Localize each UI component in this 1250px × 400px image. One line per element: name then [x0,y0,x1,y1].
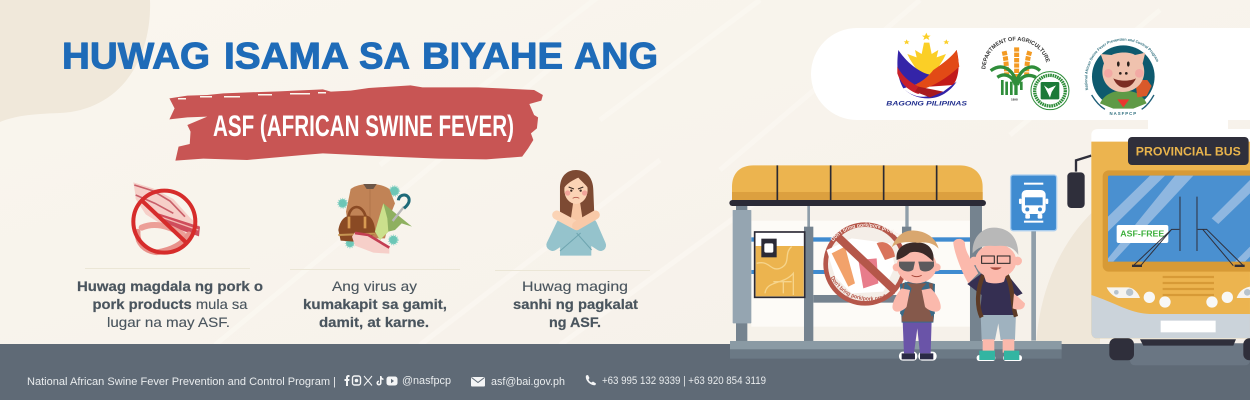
banner text: ASF (AFRICAN SWINE FEVER) [213,110,514,143]
logo pill [811,28,1250,129]
destination sign: PROVINCIAL BUS [1136,146,1241,159]
footer text [27,375,766,388]
column 1: no pork [77,182,263,330]
divider [290,268,460,270]
no pork sign [823,222,904,306]
white panel [811,28,1250,130]
map board [755,232,805,297]
divider [495,270,650,272]
bus stop sign [1011,175,1057,341]
column 2: virus clings: damit, at karne. [319,315,429,330]
older man traveller [953,228,1025,361]
column 3: woman crossing arms: ng ASF. [549,315,601,330]
icon: woman with crossed arms [552,170,601,256]
bus body [1091,129,1250,360]
bus shelter scene [729,165,1062,361]
logo: NASFPCP pig [1084,38,1158,116]
background hill behind bus [1036,205,1100,344]
no pork sign: Don't bring pork/pork products [830,276,895,301]
column 3: woman crossing arms: sanhi ng pagkalat [513,297,639,312]
column 2: virus clings [290,184,460,330]
footer email: asf@bai.gov.ph [491,376,565,388]
windshield [1103,170,1250,272]
brush stroke shape [169,85,543,161]
column 1: no pork: pork products mula sa [92,297,248,312]
title: ANG [574,36,658,76]
boy traveller [892,230,941,361]
brush banner: ASF [169,85,543,161]
column 1: no pork: lugar na may ASF. [107,315,230,330]
icon: clothes, bag, umbrella, meat [338,184,412,254]
icon: no pork products [133,182,200,253]
icon: phone [586,375,596,385]
social icons [344,375,398,386]
text block: Huwag magdala ng pork o [77,279,263,294]
column 2: virus clings: kumakapit sa gamit, [303,297,447,312]
shelter [729,165,1062,359]
footer bar [0,344,1250,400]
logo: Bagong Pilipinas [886,33,968,108]
bus [1067,129,1250,365]
mirror [1067,156,1091,208]
text block: Ang virus ay [332,279,417,294]
logo: Department of Agriculture [981,36,1070,110]
title: HUWAG [62,36,210,76]
grille and lights [1107,277,1250,308]
windshield: ASF-FREE [1120,230,1165,239]
text block: Huwag maging [522,279,628,294]
background blob: top left [0,0,150,122]
footer handle: @nasfpcp [402,375,451,387]
title: ISAMA [224,36,349,76]
icon: mail [471,377,485,386]
logos [886,32,1158,116]
title [62,36,658,76]
logo: NASFPCP pig: NASFPCP [1109,111,1137,116]
logo: Bagong Pilipinas: BAGONG PILIPINAS [886,101,968,108]
road shadow [1130,343,1250,365]
title: BIYAHE [422,36,563,76]
no pork sign: Don't bring pork/pork products [830,222,900,242]
divider [85,268,250,270]
footer phones: +63 995 132 9339 | +63 920 854 3119 [602,375,766,387]
logo: Department of Agriculture: DEPARTMENT OF AGRICULTURE [981,36,1050,69]
logo: Department of Agriculture: 1898 [1011,97,1018,101]
column 3: woman crossing arms [495,170,650,330]
destination sign [1128,137,1249,165]
title: SA [359,36,410,76]
footer program name: National African Swine Fever Prevention and Control Program | [27,376,336,388]
logo: NASFPCP pig: National African Swine Fever Prevention and Control Program [1084,38,1158,90]
